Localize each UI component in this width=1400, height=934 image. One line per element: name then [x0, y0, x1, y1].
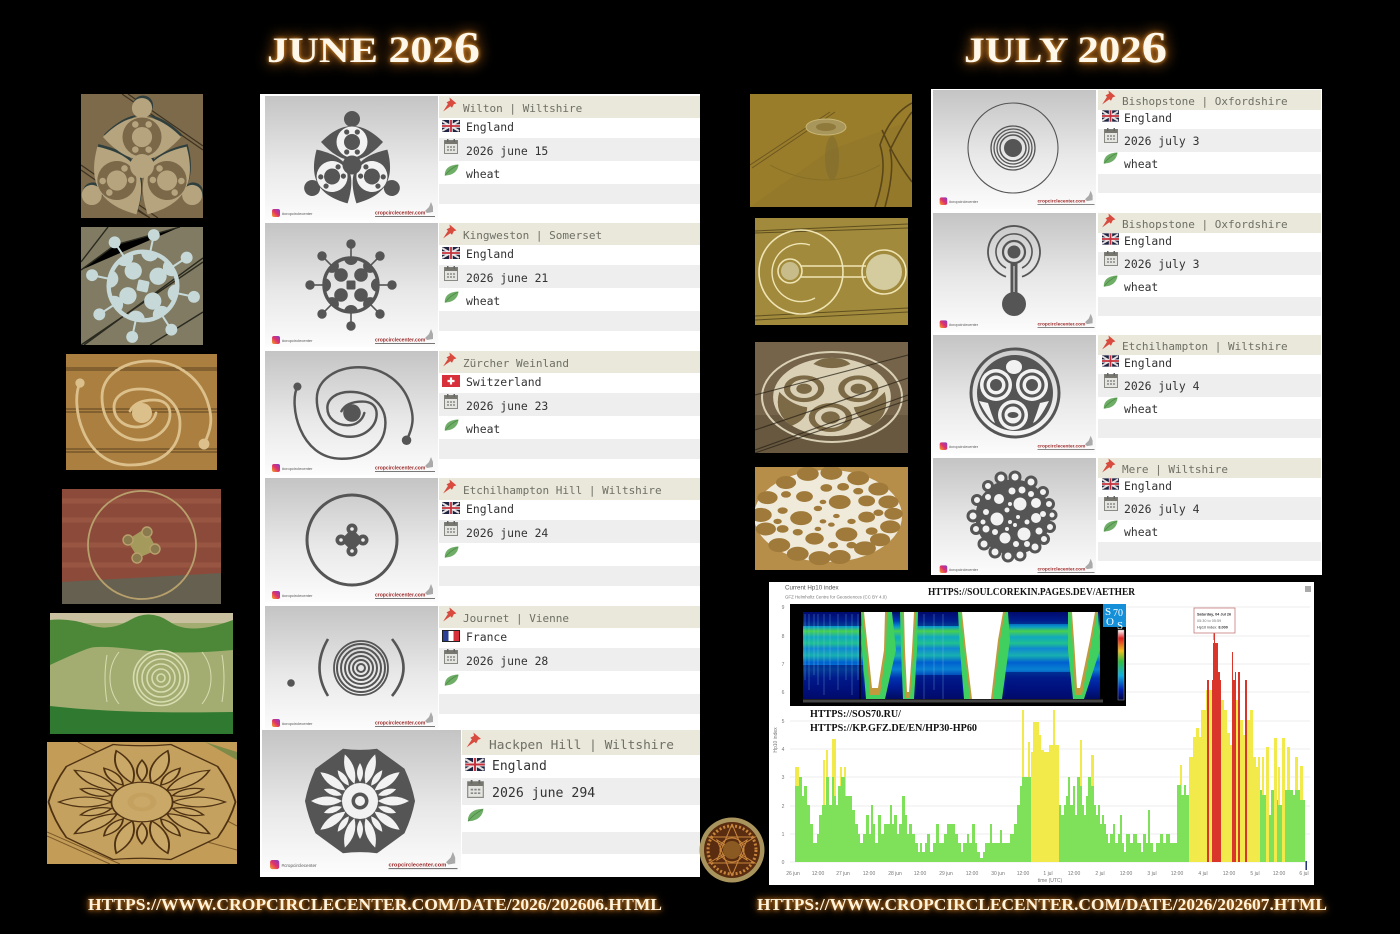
thumbnail: Zurcher Weinland: [265, 351, 438, 472]
row: Etchilhampton: [933, 335, 1321, 450]
thumbnail: Mere: [933, 458, 1096, 573]
x axis labels: 27 jun: [836, 871, 850, 877]
photo: Journet crop circle: [50, 613, 233, 734]
row: Mere: [933, 458, 1321, 573]
x axis labels: 12:00: [863, 871, 875, 877]
y axis labels: 9: [782, 605, 785, 611]
photo: Etchilhampton crop circle: [755, 342, 908, 453]
y axis labels: 0: [782, 860, 785, 866]
row: Journet: [265, 606, 700, 727]
heading: location: Etchilhampton | Wiltshire: [1122, 340, 1288, 353]
links: sos70 and kp.gfz: [810, 709, 977, 734]
x axis labels: 12:00: [1223, 871, 1235, 877]
x axis labels: 4 jul: [1198, 871, 1208, 877]
x axis labels: 28 jun: [888, 871, 902, 877]
row: Hackpen Hill: [262, 730, 700, 870]
heading: location: Mere | Wiltshire: [1122, 463, 1228, 476]
heading: location: [1098, 335, 1321, 355]
title: June 2026: JUNE 2026: [267, 23, 480, 72]
row: Kingweston: England: [466, 247, 514, 261]
row: Etchilhampton: wheat: [1124, 402, 1158, 416]
x axis labels: [786, 871, 1309, 884]
row: Etchilhampton Hill: [265, 478, 700, 599]
y axis labels: 7: [782, 662, 785, 668]
chart: Current Hp10 index with Schumann spectrogram inset: [769, 582, 1314, 885]
bars: green: [795, 777, 1305, 862]
row: Bishopstone keyhole: England: [1124, 234, 1172, 248]
y axis labels: 2: [782, 804, 785, 810]
link: July source: HTTPS://WWW.CROPCIRCLECENTER.COM/DATE/2026/202607.HTML: [757, 895, 1327, 914]
photo: Mere crop circle: [755, 467, 908, 570]
heading: location: Journet | Vienne: [463, 612, 569, 625]
thumbnail: Etchilhampton: [933, 335, 1096, 450]
row: Bishopstone rings: England: [1124, 111, 1172, 125]
heading: location: Wilton | Wiltshire: [463, 102, 582, 115]
row: Wilton: [265, 96, 700, 217]
heading: location: Kingweston | Somerset: [463, 229, 602, 242]
y axis labels: Hp10 index: [773, 727, 779, 753]
heading: location: Etchilhampton Hill | Wiltshire: [463, 484, 662, 497]
panel: June 2026 listing: [260, 94, 700, 877]
row: Bishopstone keyhole: 2026 july 3: [1124, 257, 1199, 271]
y axis labels: [773, 605, 785, 866]
blue marker: [1306, 861, 1307, 870]
link: soulcorekin: HTTPS://SOULCOREKIN.PAGES.DEV/AETHER: [928, 587, 1136, 598]
row: Zurcher Weinland: wheat: [466, 422, 500, 436]
heading: location: [439, 606, 700, 628]
photo: Wilton crop circle: [81, 94, 203, 218]
row: Mere: wheat: [1124, 525, 1158, 539]
x axis labels: 2 jul: [1095, 871, 1105, 877]
heading: location: [439, 96, 700, 118]
heading: location: [439, 351, 700, 373]
x axis labels: 12:00: [1120, 871, 1132, 877]
row: Zurcher Weinland: Switzerland: [466, 375, 541, 389]
links: sos70 and kp.gfz: HTTPS://SOS70.RU/: [810, 709, 902, 720]
row: Etchilhampton: 2026 july 4: [1124, 379, 1199, 393]
heading: location: [439, 223, 700, 245]
photo: Bishopstone rings crop circle: [750, 94, 912, 207]
heading: location: Zürcher Weinland: [463, 357, 569, 370]
heading: location: [439, 478, 700, 500]
panel: July 2026 listing: [931, 89, 1322, 575]
menu icon: [1305, 587, 1311, 591]
SOS70 logo: S: [1105, 606, 1111, 618]
row: Bishopstone rings: [933, 90, 1321, 205]
x axis labels: 12:00: [914, 871, 926, 877]
row: Bishopstone rings: 2026 july 3: [1124, 134, 1199, 148]
x axis labels: 26 jun: [786, 871, 800, 877]
row: Mere: 2026 july 4: [1124, 502, 1199, 516]
row: Journet: France: [466, 630, 507, 644]
x axis labels: 1 jul: [1043, 871, 1053, 877]
photo: Etchilhampton Hill crop circle: [62, 489, 221, 604]
row: Wilton: England: [466, 120, 514, 134]
SOS70 logo: S: [1117, 620, 1123, 632]
x axis labels: 3 jul: [1147, 871, 1157, 877]
thumbnail: Etchilhampton Hill: [265, 478, 438, 599]
row: Mere: England: [1124, 479, 1172, 493]
row: Etchilhampton Hill: England: [466, 502, 514, 516]
tooltip: Saturday, 04 Jul 26: [1197, 612, 1231, 616]
x axis labels: 12:00: [1273, 871, 1285, 877]
y axis labels: 5: [782, 719, 785, 725]
thumbnail: Hackpen Hill: [262, 730, 461, 870]
heading: location: Hackpen Hill | Wiltshire: [489, 738, 674, 753]
chart title: Current Hp10 index: [785, 584, 840, 592]
bars: red: [1207, 632, 1247, 862]
tooltip: 05:30 to 05:59: [1197, 619, 1221, 623]
x axis labels: 12:00: [1068, 871, 1080, 877]
x axis labels: 12:00: [1171, 871, 1183, 877]
thumbnail: Bishopstone keyhole: [933, 213, 1096, 328]
row: Etchilhampton: England: [1124, 356, 1172, 370]
spectrogram inset: [790, 604, 1126, 706]
row: Zurcher Weinland: 2026 june 23: [466, 399, 548, 413]
row: Hackpen Hill: 2026 june 294: [492, 786, 595, 801]
chart title: [785, 584, 887, 600]
title: July 2026: JULY 2026: [964, 23, 1167, 72]
row: Kingweston: [265, 223, 700, 344]
heading: location: [1098, 213, 1321, 233]
tooltip: Hp10 index: 8.000: [1197, 626, 1228, 630]
SOS70 logo: O: [1106, 616, 1114, 628]
heading: location: Bishopstone | Oxfordshire: [1122, 95, 1288, 108]
chart title: GFZ Helmholtz Centre for Geosciences (CC BY 4.0): [785, 594, 887, 600]
SOS70 logo: [1103, 604, 1126, 632]
row: Wilton: 2026 june 15: [466, 144, 548, 158]
link: June source: HTTPS://WWW.CROPCIRCLECENTER.COM/DATE/2026/202606.HTML: [88, 895, 662, 914]
x axis labels: time (UTC): [1038, 878, 1063, 884]
thumbnail: Journet: [265, 606, 438, 727]
links: sos70 and kp.gfz: HTTPS://KP.GFZ.DE/EN/HP30-HP60: [810, 723, 977, 734]
y axis labels: 6: [782, 690, 785, 696]
y axis labels: 3: [782, 775, 785, 781]
row: Kingweston: 2026 june 21: [466, 271, 548, 285]
x axis labels: 12:00: [812, 871, 824, 877]
x axis labels: 6 jul: [1299, 871, 1309, 877]
photo: Kingweston crop circle: [81, 227, 203, 345]
medallion icon: [700, 818, 764, 882]
tooltip: [1194, 608, 1235, 640]
heading: location: [1098, 90, 1321, 110]
thumbnail: Bishopstone rings: [933, 90, 1096, 205]
x axis labels: 5 jul: [1250, 871, 1260, 877]
heading: location: [1098, 458, 1321, 478]
row: Bishopstone keyhole: wheat: [1124, 280, 1158, 294]
y axis labels: 8: [782, 634, 785, 640]
row: Zurcher Weinland: [265, 351, 700, 472]
heading: location: [462, 730, 700, 755]
x axis labels: 30 jun: [991, 871, 1005, 877]
photo: Hackpen Hill crop circle: [47, 742, 237, 864]
y axis labels: 4: [782, 747, 785, 753]
row: Wilton: wheat: [466, 167, 500, 181]
row: Bishopstone keyhole: [933, 213, 1321, 328]
row: Hackpen Hill: England: [492, 759, 547, 774]
row: Etchilhampton Hill: 2026 june 24: [466, 526, 548, 540]
row: Journet: 2026 june 28: [466, 654, 548, 668]
photo: Bishopstone keyhole crop circle: [755, 218, 908, 325]
x axis labels: 12:00: [966, 871, 978, 877]
x axis labels: 12:00: [1017, 871, 1029, 877]
x axis labels: 29 jun: [939, 871, 953, 877]
row: Bishopstone rings: wheat: [1124, 157, 1158, 171]
photo: Zurcher Weinland spiral crop circle: [66, 354, 217, 470]
thumbnail: Wilton: [265, 96, 438, 217]
thumbnail: Kingweston: [265, 223, 438, 344]
heading: location: Bishopstone | Oxfordshire: [1122, 218, 1288, 231]
y axis labels: 1: [782, 832, 785, 838]
bars: yellow: [795, 690, 1303, 862]
SOS70 logo: 70: [1113, 608, 1123, 619]
row: Kingweston: wheat: [466, 294, 500, 308]
